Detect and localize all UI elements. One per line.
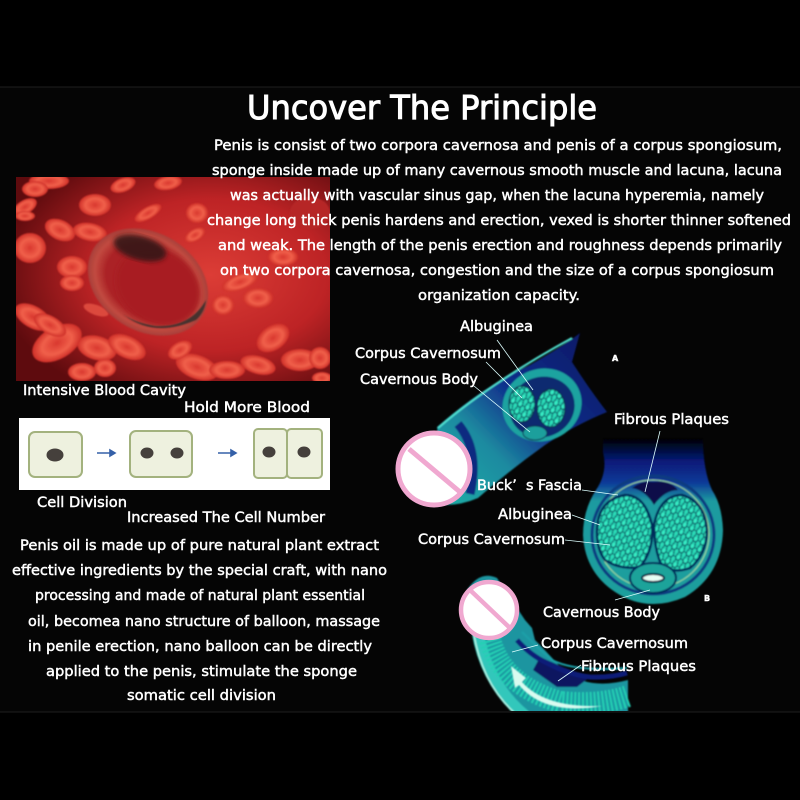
diagram A: oblique section [437,333,607,505]
cell 2 [130,431,192,477]
cell 1 [29,432,82,477]
text block: penis oil: processing and made of natural plant essential [35,588,365,604]
censor mark C [461,582,517,638]
text block: principle: change long thick penis hardens and erection, vexed is shorter thinner softened [207,213,791,229]
diagram B: cross section [583,438,723,604]
text block: penis oil: applied to the penis, stimulate the sponge [46,664,357,680]
diagram labels: Corpus Cavernosum [355,346,501,362]
diagram labels: Cavernous Body [360,372,478,388]
text block: principle: was actually with vascular sinus gap, when the lacuna hyperemia, namely [230,188,764,204]
caption: intensive blood cavity: Intensive Blood Cavity [23,383,186,399]
text block: penis oil: in penile erection, nano balloon can be directly [28,639,372,655]
diagram labels: Fibrous Plaques [581,659,696,675]
text block: principle: organization capacity. [418,288,580,304]
label B: B [704,594,710,603]
caption: increased the cell number: Increased The Cell Number [127,510,325,526]
diagram labels: Fibrous Plaques [614,412,729,428]
content band [0,87,800,712]
central red blood cell [88,228,209,336]
diagram labels: Cavernous Body [543,605,660,621]
text block: penis oil: oil, becomea nano structure of balloon, massage [28,614,380,630]
diagram labels: Albuginea [498,507,572,523]
cell 3 [254,429,322,478]
diagram labels: Buck’ s Fascia [477,478,582,494]
text block: penis oil: somatic cell division [127,688,276,704]
arrow 2 [218,450,236,456]
text block: principle [207,138,791,304]
diagram labels: Albuginea [460,319,533,335]
caption: hold more blood: Hold More Blood [184,400,310,416]
text block: penis oil [12,538,387,704]
diagram labels [355,319,729,675]
arrow 1 [97,450,115,456]
text block: penis oil: effective ingredients by the special craft, with nano [12,563,387,579]
text block: principle: on two corpora cavernosa, congestion and the size of a corpus spongiosum [220,263,774,279]
text block: principle: and weak. The length of the penis erection and roughness depends primarily [218,238,782,254]
diagram labels: Corpus Cavernosum [418,532,565,548]
caption: cell division: Cell Division [37,495,127,511]
text block: principle: Penis is consist of two corpora cavernosa and penis of a corpus spongiosum, [214,138,782,154]
label A: A [612,354,619,363]
text block: penis oil: Penis oil is made up of pure natural plant extract [20,538,380,554]
photo: red blood cells [10,173,332,386]
diagram C: longitudinal section [467,576,628,716]
leader lines [474,340,660,681]
text block: principle: sponge inside made up of many cavernous smooth muscle and lacuna, lacuna [212,163,782,179]
diagram labels: Corpus Cavernosum [541,636,688,652]
panel: cell division [19,418,330,490]
censor mark A [398,433,470,505]
curved arrow [511,666,602,708]
title: Uncover The Principle [247,88,597,127]
